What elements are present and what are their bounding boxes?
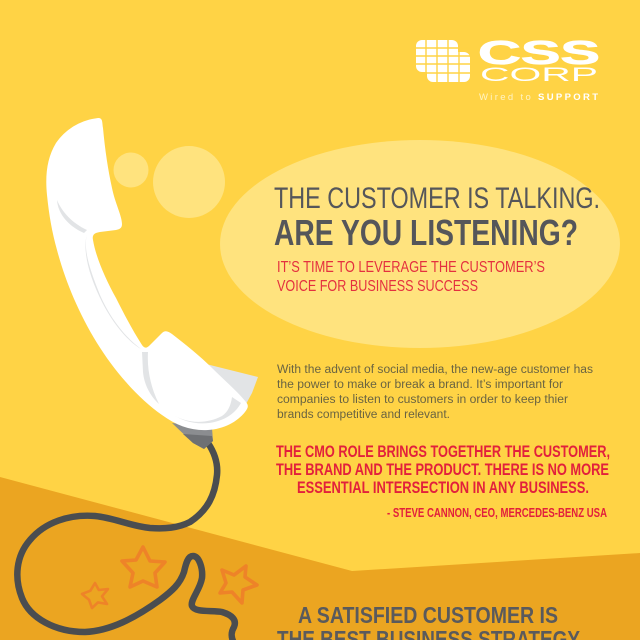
- icon: small star: [82, 583, 108, 608]
- logo wordmark: CORP: CORP: [480, 65, 598, 86]
- logo wordmark: CSS: CSS: [478, 34, 600, 71]
- title: [274, 182, 600, 253]
- logo tagline: Wired to SUPPORT: [479, 92, 598, 103]
- icon: logo grid: [416, 40, 470, 82]
- bottom heading: A SATISFIED CUSTOMER IS: [298, 602, 558, 628]
- subtitle: IT’S TIME TO LEVERAGE THE CUSTOMER’S: [277, 259, 545, 276]
- body paragraph: brands competitive and relevant.: [277, 409, 450, 421]
- grey flap behind mouthpiece: [206, 364, 258, 404]
- stars: [82, 547, 257, 608]
- bottom heading: [277, 602, 580, 640]
- body paragraph: the power to make or break a brand. It’s important for: [277, 379, 563, 391]
- subtitle: VOICE FOR BUSINESS SUCCESS: [277, 278, 478, 295]
- icon: right star: [220, 566, 257, 603]
- subtitle: [277, 259, 545, 295]
- handset body: [46, 118, 248, 430]
- background: darker lower band: [0, 477, 640, 640]
- quote: [276, 443, 610, 497]
- handset shading: [57, 200, 241, 423]
- connector: [172, 423, 213, 449]
- body paragraph: With the advent of social media, the new-age customer has: [277, 364, 593, 376]
- body paragraph: [277, 364, 593, 421]
- icon: large star: [122, 547, 165, 587]
- phone handset: [46, 118, 258, 449]
- speech bubble: large ellipse with two thought circles: [114, 140, 620, 348]
- logo: CSS Corp: [416, 34, 600, 103]
- body paragraph: companies to listen to customers in order to keep thier: [277, 394, 568, 406]
- cord: [17, 443, 235, 640]
